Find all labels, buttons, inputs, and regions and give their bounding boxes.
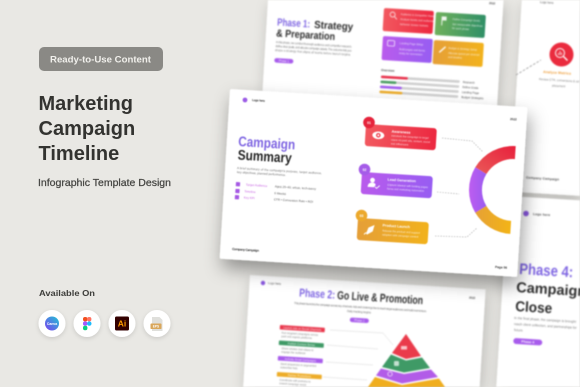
card: awareness: and influencers <box>391 142 409 147</box>
phase 2 pill: Phase 2 <box>354 318 365 323</box>
page number: 2022 <box>489 1 496 5</box>
phase 4 pill: Phase 4 <box>521 340 534 344</box>
step: green: Publish Content Series <box>288 341 316 347</box>
page number: 2022 <box>469 296 476 300</box>
phase 4 heading <box>515 261 580 317</box>
step: orange <box>276 372 322 387</box>
pyramid chart <box>368 334 445 387</box>
summary table: Key KPI <box>244 196 255 200</box>
title: Campaign <box>38 118 135 140</box>
phase 1 description: In this phase, we conduct thorough audience and competitor research, <box>276 40 352 49</box>
logo <box>523 211 550 217</box>
panel: analysis slide <box>510 0 580 196</box>
campaign summary heading: Summary <box>237 147 292 166</box>
phase 2 description: This phase launches the campaign across key channels. Ads and content go live to reach target audiences and build momentum. <box>294 301 427 313</box>
phase 2 heading: Phase 2: <box>299 288 335 302</box>
step: orange: Partner Promotions <box>288 373 312 378</box>
card: lead generation: Lead Generation <box>387 178 416 183</box>
icon: illustrator: Ai <box>118 318 126 328</box>
summary table <box>235 182 317 204</box>
phase 2 description: Daily tracking begins <box>347 309 372 314</box>
summary table: CTR • Conversion Rate • ROI <box>274 197 313 204</box>
phase 4 heading: Close <box>515 299 553 317</box>
card: awareness: Introduce the campaign to target <box>391 134 429 140</box>
icon: eps file <box>144 310 170 337</box>
step: red: paid and organic platforms <box>281 334 313 340</box>
phase 1 description: define clear goals, and allocate campaign assets. The outcome lets you <box>275 44 352 53</box>
summary table: Ages 25–40, urban, tech-savvy <box>275 184 317 191</box>
card: research: Analyze trends and audience <box>400 17 434 23</box>
card: product launch <box>356 210 429 244</box>
dashed connector <box>516 60 541 75</box>
card: research: behavior across markets <box>400 22 429 28</box>
card: product launch: Release the product and support <box>382 229 420 235</box>
phase 2 heading: Go Live & Promotion <box>337 290 423 307</box>
step: green <box>278 340 324 356</box>
panel: campaign summary slide <box>220 89 527 277</box>
progress bars: Research <box>463 80 475 85</box>
phase 4 description: future. <box>514 328 524 333</box>
card: research <box>383 8 440 34</box>
phase 2 heading <box>299 288 423 307</box>
logo: Logo here <box>268 281 282 286</box>
card: goals <box>435 12 486 38</box>
analyze metrics text <box>539 77 580 88</box>
card: awareness <box>363 117 437 150</box>
step: red: Launch Ads on Social Channels <box>283 326 322 332</box>
card: goals: Set measurable objectives <box>452 22 483 28</box>
step: purple: Activate Email Campaigns <box>285 357 317 363</box>
summary description: key objectives, planned performance. <box>237 170 286 177</box>
card: awareness: 01 <box>367 121 371 125</box>
icon: canva: Canva <box>47 322 57 326</box>
phase 1 heading: Strategy <box>314 19 354 33</box>
footer: Company Campaign <box>526 176 559 182</box>
card: goals: for each phase <box>452 26 470 31</box>
footer left: Company Campaign <box>232 247 259 253</box>
progress bars: Define Goals <box>462 85 479 90</box>
step: red <box>279 325 325 341</box>
card: awareness: Awareness <box>391 130 411 135</box>
badge: ready-to-use content <box>39 47 163 71</box>
title: Timeline <box>38 143 119 165</box>
connector lines <box>323 330 393 380</box>
card: landing page <box>382 36 433 63</box>
card: product launch: 03 <box>360 214 363 218</box>
logo <box>243 98 265 103</box>
progress bars: Budget Strategies <box>461 95 484 100</box>
card: product launch: adoption with campaign content <box>382 233 419 239</box>
analyze metrics text: placement <box>552 84 566 88</box>
summary table: Timeline <box>244 189 256 194</box>
logo: Logo here <box>252 98 265 103</box>
card: budget: Budget & Strategy Setup <box>448 46 478 52</box>
subtitle: Infographic Template Design <box>38 177 171 189</box>
phase 1 heading: & Preparation <box>276 28 335 43</box>
panel: phase 1 slide <box>262 0 504 107</box>
logo: Logo here <box>540 0 554 5</box>
step: orange: extend campaign reach <box>279 381 307 387</box>
summary table: Target Audience <box>246 183 268 188</box>
panel: phase 4 slide <box>496 196 580 387</box>
icon: eps file: EPS <box>153 324 159 328</box>
footer right: Page 06 <box>495 265 507 270</box>
connectors <box>435 138 483 237</box>
phase 1 description <box>275 40 352 57</box>
overview label: Overview <box>381 68 395 73</box>
logo <box>261 281 282 286</box>
phase 1 heading <box>276 17 354 43</box>
analyze metrics heading: Analyze Metrics <box>543 70 571 76</box>
campaign summary heading: Campaign <box>238 133 296 152</box>
phase 2 pill <box>350 318 369 323</box>
step: purple: Send sequences to segmented <box>280 362 317 368</box>
summary description: A brief summary of the campaign's purpose, target audience, <box>237 166 322 175</box>
card: landing page: Build pages and forms <box>399 47 426 53</box>
phase 1 description: shape a strategy that aligns all teams before launch begins. <box>275 48 351 57</box>
card: research: Audience & Competitor Research <box>401 12 440 18</box>
phase 1 heading: Phase 1: <box>277 17 310 31</box>
donut chart <box>469 146 516 234</box>
logo: Logo here <box>533 212 550 217</box>
phase 4 description: In the final phase, the campaign is brought <box>514 316 576 324</box>
card: landing page: ready for conversion <box>399 51 423 56</box>
card: landing page: Landing Page Setup <box>399 41 424 46</box>
card: lead generation: forms and marketing automation <box>387 187 425 193</box>
card: lead generation: 02 <box>363 168 366 172</box>
card: product launch: Product Launch <box>382 224 410 229</box>
step: orange: Coordinate with partners to <box>279 378 311 384</box>
phase 4 description <box>514 316 578 333</box>
card: lead generation <box>359 164 433 198</box>
campaign summary heading <box>237 133 296 166</box>
title <box>38 93 135 165</box>
card: budget: and timeline <box>448 55 463 60</box>
step: green: Share articles and videos to <box>281 346 314 352</box>
icon: figma <box>74 310 100 337</box>
card: budget <box>433 40 484 67</box>
icon: magnifier on red circle <box>550 42 574 66</box>
phase 1 pill: Phase 1 <box>279 59 290 63</box>
available on heading: Available On <box>39 288 95 298</box>
card: goals: Define Campaign Goals <box>452 17 481 23</box>
title: Marketing <box>38 93 133 115</box>
step: purple: subscriber lists <box>280 365 298 370</box>
card: budget: Allocate spend per channel <box>448 51 480 57</box>
card: lead generation: Capture interest with landing pages <box>387 183 429 189</box>
phase 4 pill <box>513 338 542 346</box>
card: awareness: users via paid ads, content, social <box>391 138 430 144</box>
phase 1 pill <box>274 58 293 64</box>
step: purple <box>277 356 323 372</box>
badge: ready-to-use content: Ready-to-Use Content <box>50 54 151 64</box>
panel: phase 2 slide <box>243 275 486 387</box>
icon: illustrator <box>108 310 136 337</box>
analyze metrics text: Review CTR, conversions & ad <box>539 77 580 83</box>
icon: canva <box>38 310 66 337</box>
summary table: 6 Weeks <box>274 191 287 196</box>
phase 4 description: reach client collection, and partnerships for <box>514 322 578 330</box>
page year: 2022 <box>510 117 517 121</box>
progress bars <box>379 75 484 100</box>
progress bars: Landing Page <box>462 90 480 95</box>
step: red: Run targeted campaigns across <box>281 331 319 337</box>
step: green: engage the audience <box>281 350 306 355</box>
